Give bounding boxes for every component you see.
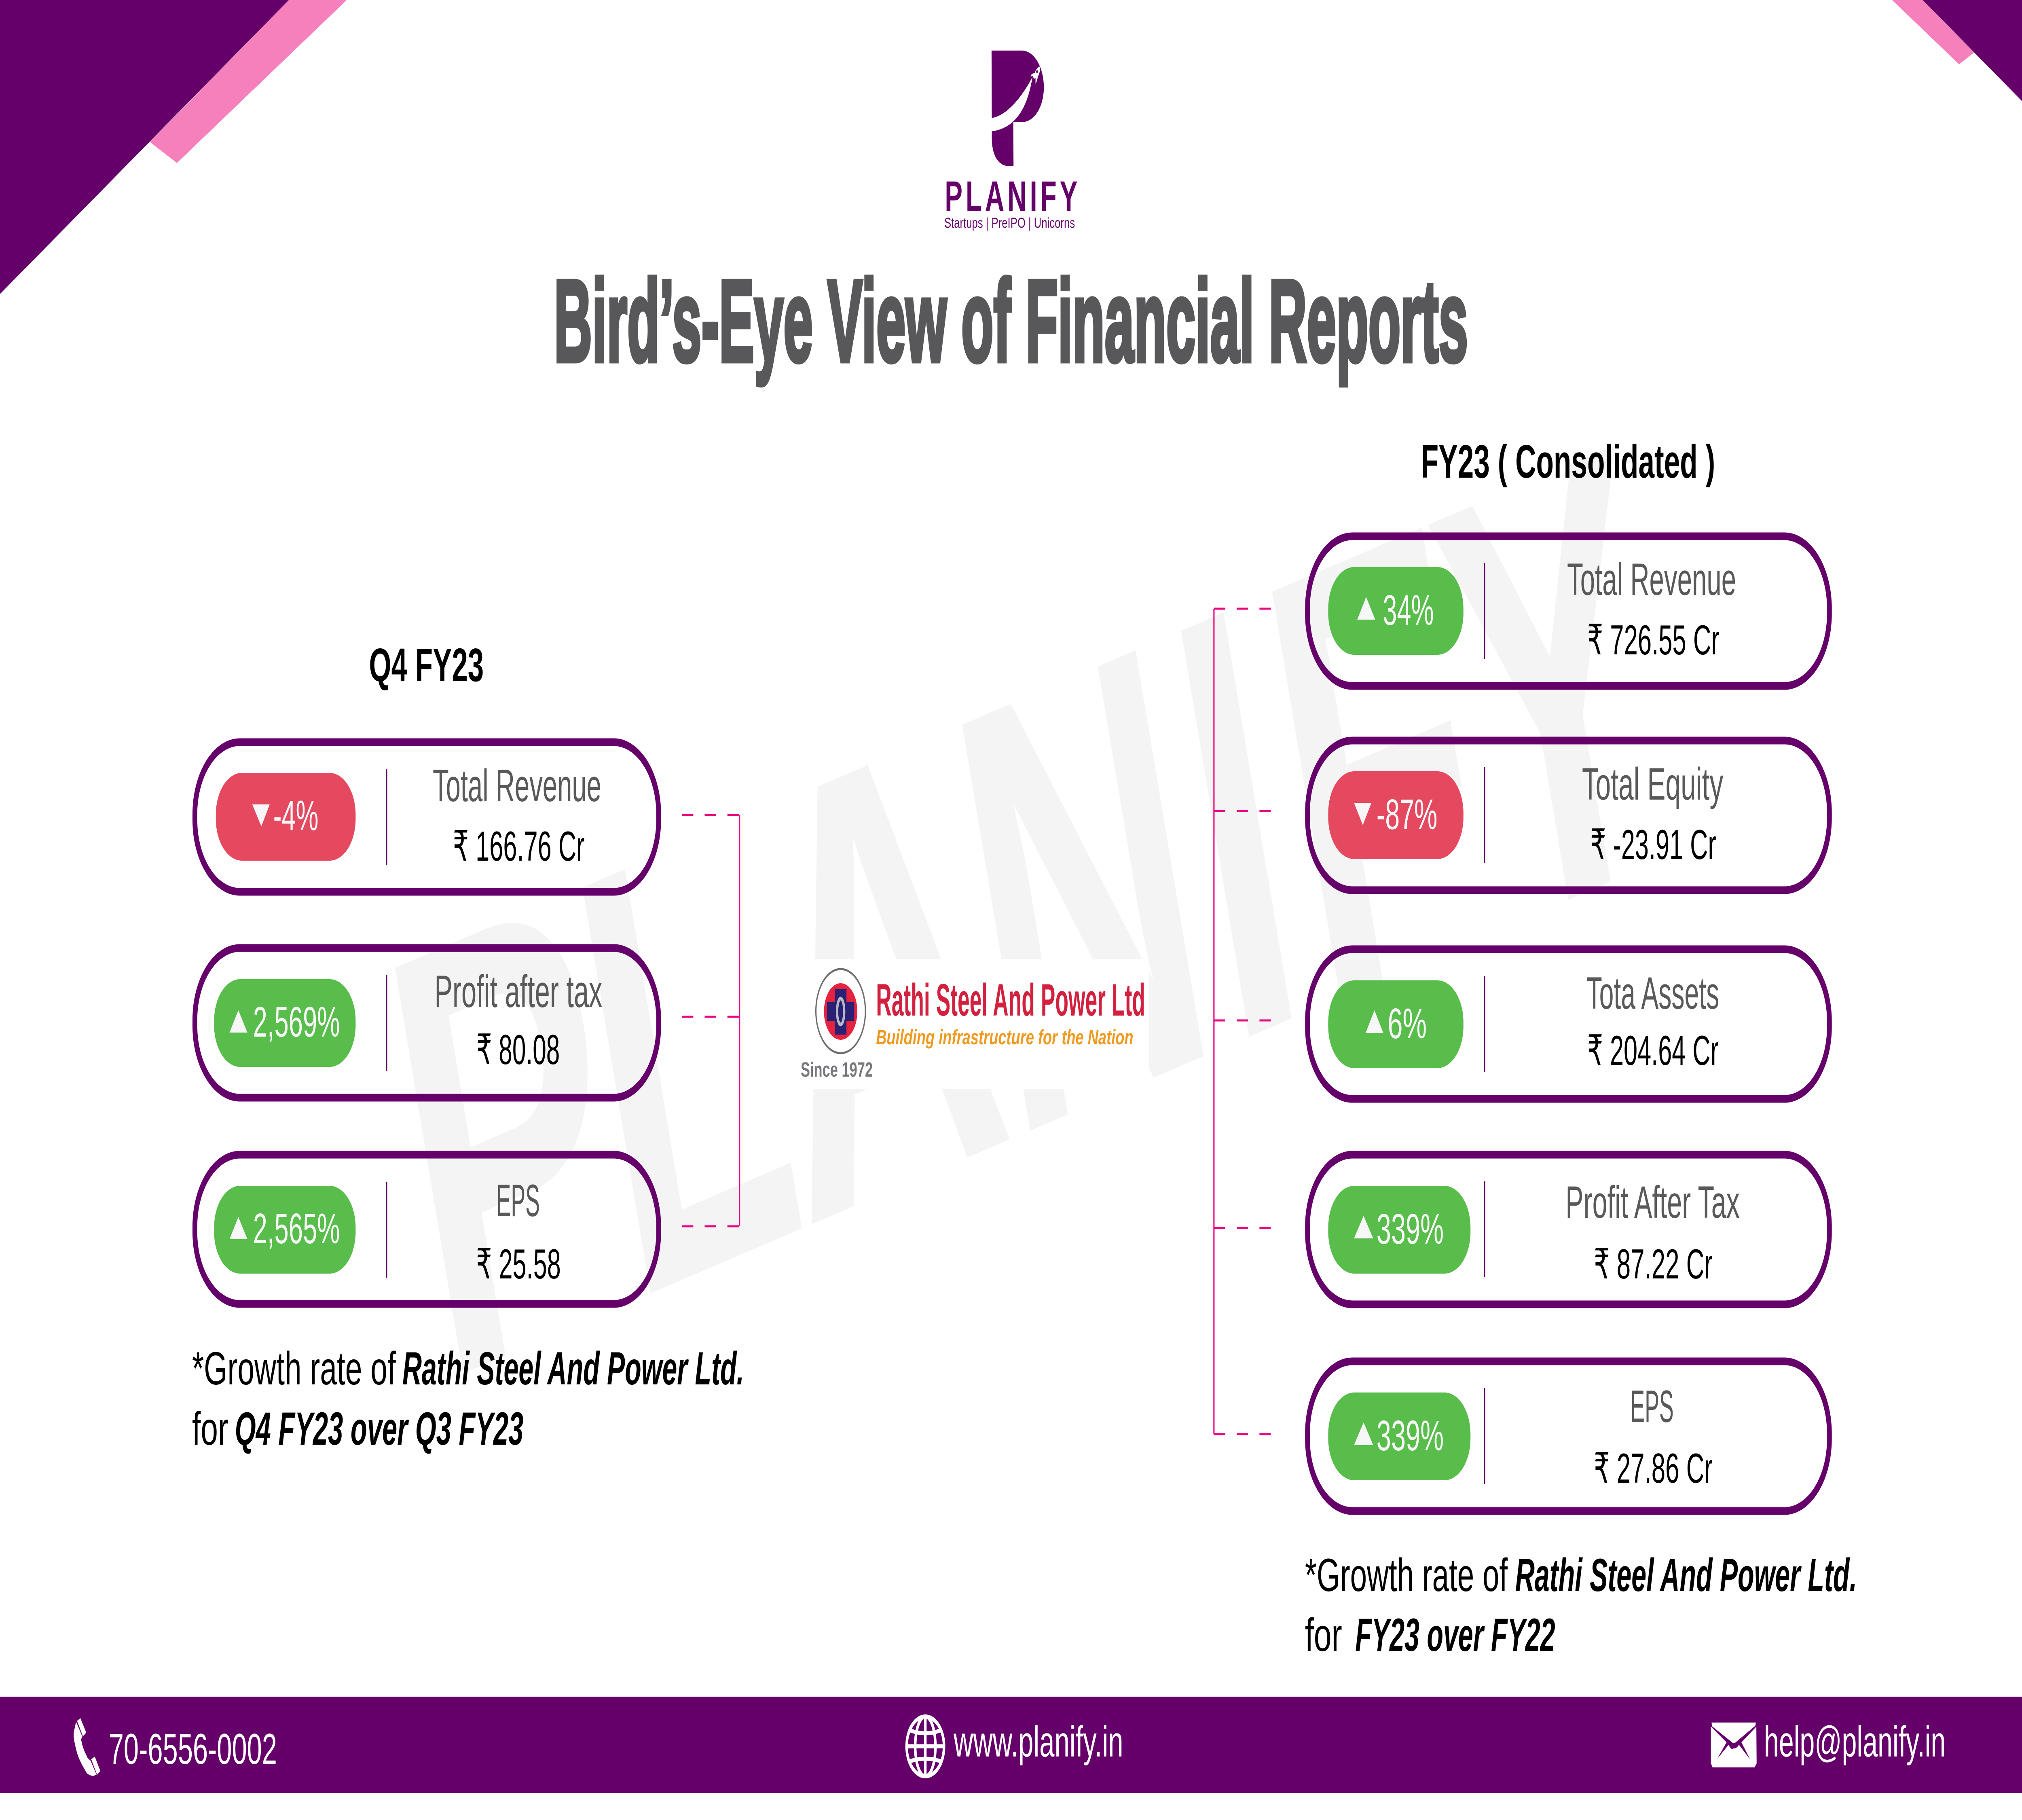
connector: right bracket <box>1214 609 1271 1434</box>
growth: 6%: 6% <box>1387 999 1427 1048</box>
badge: 2,569% <box>214 979 355 1067</box>
badge: 6% <box>1328 980 1464 1068</box>
text block: Q4 footnote: Q4 FY23 over Q3 FY23 <box>235 1403 523 1455</box>
watermark: PLANIFY: I <box>1140 476 1332 1170</box>
growth: 34%: 34% <box>1383 586 1434 634</box>
growth: -4%: -4% <box>273 791 318 840</box>
growth: 2,565%: 2,565% <box>253 1204 340 1253</box>
watermark: PLANIFY: Y <box>1402 315 1709 1058</box>
logo: Rathi Steel And Power Ltd <box>801 959 1149 1089</box>
text block: FY23 footnote <box>1305 1549 1857 1661</box>
icon: down arrow <box>252 804 270 826</box>
text block: FY23 footnote: *Growth rate of <box>1305 1549 1508 1601</box>
phone number: 70-6556-0002 <box>109 1725 277 1773</box>
badge: 339% <box>1328 1186 1470 1274</box>
icon: up arrow <box>1354 1216 1373 1238</box>
text block: Q4 footnote: *Growth rate of <box>192 1343 396 1395</box>
panel: FY23 Total Equity <box>1307 741 1830 890</box>
company name: Rathi Steel And Power Ltd <box>876 974 1145 1025</box>
value: ₹ 166.76 Cr <box>453 823 585 870</box>
text block: Q4 footnote <box>192 1343 744 1455</box>
badge: 34% <box>1328 567 1464 655</box>
growth: 339%: 339% <box>1377 1205 1444 1253</box>
watermark: PLANIFY: A <box>715 603 1038 1353</box>
watermark: PLANIFY: L <box>541 691 832 1427</box>
growth: 2,569%: 2,569% <box>253 998 340 1046</box>
logo wordmark: PLANIFY <box>945 172 1077 220</box>
growth: 339%: 339% <box>1377 1412 1444 1460</box>
value: ₹ 87.22 Cr <box>1594 1240 1713 1288</box>
label: Total Revenue <box>433 760 601 811</box>
icon: company seal <box>816 969 865 1053</box>
connector: left bracket <box>682 815 740 1226</box>
icon: up arrow <box>1366 1010 1383 1033</box>
icon: phone <box>74 1718 100 1776</box>
badge: -4% <box>216 773 355 861</box>
growth: -87%: -87% <box>1377 790 1437 838</box>
value: ₹ 204.64 Cr <box>1587 1027 1719 1074</box>
text block: FY23 footnote: FY23 over FY22 <box>1355 1609 1555 1661</box>
text block: FY23 footnote: Rathi Steel And Power Ltd. <box>1515 1549 1857 1601</box>
logo: Planify <box>944 51 1077 231</box>
label: EPS <box>497 1175 540 1226</box>
label: Tota Assets <box>1586 967 1719 1018</box>
label: EPS <box>1630 1381 1674 1432</box>
panel: Q4 EPS <box>195 1155 659 1304</box>
value: ₹ 25.58 <box>476 1240 561 1288</box>
value: ₹ 80.08 <box>476 1026 560 1073</box>
label: Profit after tax <box>434 966 602 1017</box>
panel: Q4 Profit after tax <box>195 948 659 1098</box>
text block: FY23 footnote: for <box>1305 1609 1342 1661</box>
icon: up arrow <box>230 1217 247 1239</box>
icon: up arrow <box>1357 597 1375 620</box>
text block: Q4 footnote: Rathi Steel And Power Ltd. <box>402 1343 744 1395</box>
icon: up arrow <box>230 1010 247 1033</box>
badge: -87% <box>1328 771 1464 859</box>
footer band <box>0 1697 2022 1793</box>
label: Total Revenue <box>1567 554 1736 605</box>
icon: envelope <box>1711 1723 1757 1767</box>
label: Profit After Tax <box>1565 1177 1740 1227</box>
icon: down arrow <box>1354 803 1371 825</box>
panel: FY23 Total Assets <box>1307 949 1830 1099</box>
panel: Q4 Total Revenue <box>195 742 659 892</box>
badge: 2,565% <box>214 1186 355 1274</box>
watermark: PLANIFY <box>354 315 1709 1507</box>
panel: FY23 Total Revenue <box>1307 536 1830 686</box>
panel: FY23 Profit After Tax <box>1307 1155 1830 1304</box>
watermark: PLANIFY: F <box>1231 396 1521 1131</box>
text block: Q4 footnote: for <box>192 1403 228 1455</box>
icon: up arrow <box>1354 1422 1373 1445</box>
watermark: PLANIFY: N <box>921 514 1244 1264</box>
website: www.planify.in <box>953 1717 1123 1766</box>
corner decoration: top left <box>0 0 347 294</box>
value: ₹ 27.86 Cr <box>1594 1445 1713 1492</box>
watermark: PLANIFY: P <box>354 764 661 1507</box>
value: ₹ 726.55 Cr <box>1587 616 1720 664</box>
badge: 339% <box>1328 1393 1470 1480</box>
logo tagline: Startups | PreIPO | Unicorns <box>944 216 1075 231</box>
since 1972: Since 1972 <box>801 1059 873 1081</box>
heading: Q4 FY23: Q4 FY23 <box>369 639 484 691</box>
corner decoration: top right <box>1892 0 2022 101</box>
title: Bird’s-Eye View of Financial Reports <box>554 256 1468 386</box>
panel: FY23 EPS <box>1307 1361 1830 1511</box>
icon: Planify P with rocket <box>990 51 1044 166</box>
email: help@planify.in <box>1764 1717 1946 1766</box>
company tagline: Building infrastructure for the Nation <box>876 1026 1134 1049</box>
heading: FY23 Consolidated: FY23 ( Consolidated ) <box>1421 436 1715 488</box>
label: Total Equity <box>1582 758 1723 809</box>
icon: globe <box>907 1716 944 1776</box>
value: ₹ -23.91 Cr <box>1590 821 1716 868</box>
